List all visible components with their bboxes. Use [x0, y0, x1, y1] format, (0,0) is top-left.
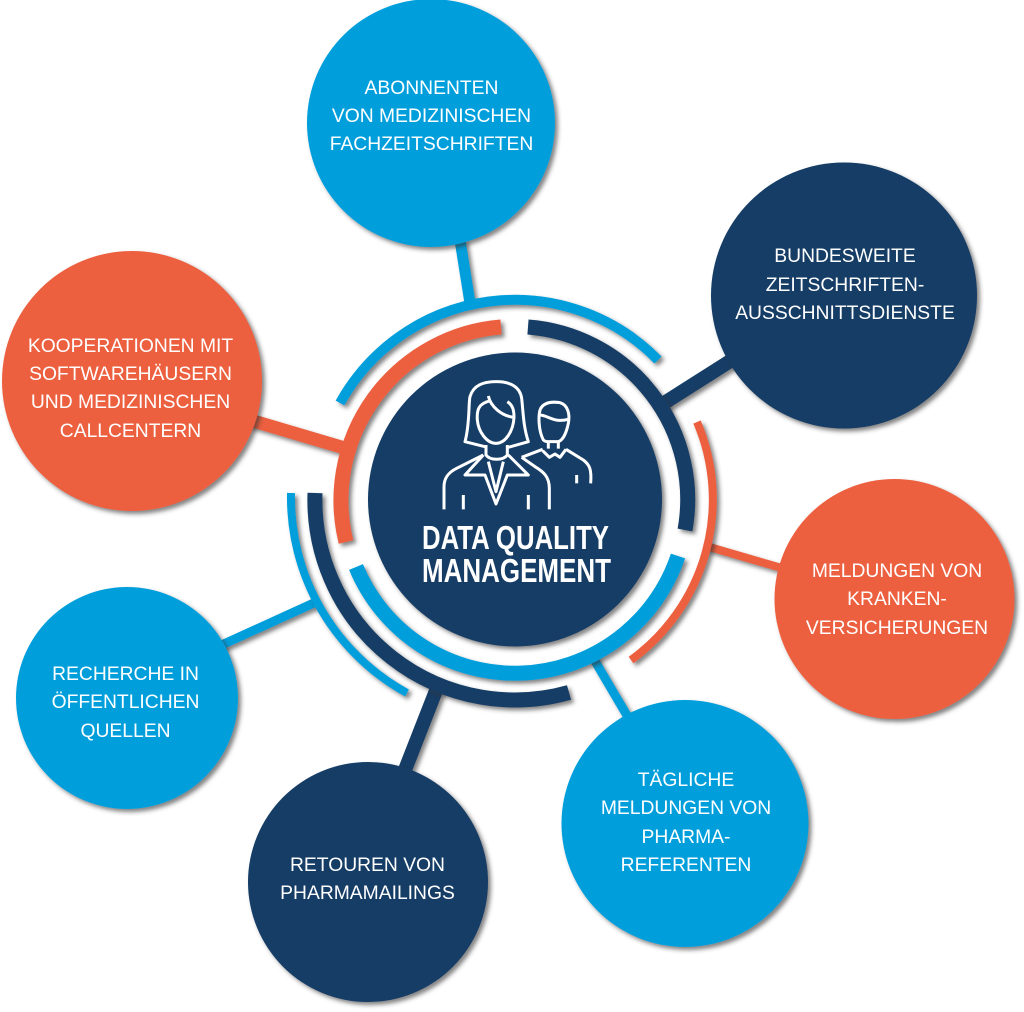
node: daily pharma rep reports: REFERENTEN: [621, 855, 751, 876]
arc: top blue thin: [340, 300, 658, 403]
connector: blue lower right: [592, 656, 632, 724]
connector: blue left: [215, 602, 316, 648]
arc: right navy thick: [528, 327, 688, 530]
node: pharma mailing returns: PHARMAMAILINGS: [280, 883, 455, 904]
node: subscribers of medical journals: FACHZEITSCHRIFTEN: [330, 134, 533, 155]
node: daily pharma rep reports: PHARMA-: [642, 827, 730, 848]
node: health insurer reports: [774, 479, 1014, 719]
node: software house and callcenter cooperations: SOFTWAREHÄUSERN: [29, 363, 232, 385]
node: subscribers of medical journals: VON MEDIZINISCHEN: [332, 106, 531, 127]
node: public source research: QUELLEN: [80, 721, 171, 742]
title: data quality management: [422, 519, 611, 589]
central hub: [368, 352, 662, 646]
node: nationwide clipping services: BUNDESWEITE: [774, 246, 916, 267]
connector: navy upper right: [661, 358, 735, 405]
node: software house and callcenter cooperations: CALLCENTERN: [60, 421, 201, 442]
node: health insurer reports: VERSICHERUNGEN: [806, 618, 988, 639]
node: subscribers of medical journals: [307, 0, 555, 247]
node: nationwide clipping services: AUSSCHNITTSDIENSTE: [735, 303, 955, 324]
node: software house and callcenter cooperations: KOOPERATIONEN MIT: [28, 336, 233, 357]
node: subscribers of medical journals: ABONNENTEN: [365, 78, 498, 99]
node: public source research: RECHERCHE IN: [52, 664, 199, 685]
node: software house and callcenter cooperations: [2, 251, 262, 511]
node: pharma mailing returns: RETOUREN VON: [290, 855, 445, 876]
node: pharma mailing returns: [248, 762, 488, 1002]
node: nationwide clipping services: [711, 162, 977, 428]
node: health insurer reports: MELDUNGEN VON: [812, 561, 982, 582]
node: daily pharma rep reports: MELDUNGEN VON: [601, 798, 771, 819]
node: software house and callcenter cooperations: UND MEDIZINISCHEN: [31, 392, 230, 413]
node: public source research: [16, 587, 238, 809]
arc: bottom blue thick: [356, 556, 678, 673]
node: nationwide clipping services: ZEITSCHRIFTEN-: [766, 275, 924, 296]
icon: two business people: [444, 382, 591, 509]
connector: orange right: [706, 546, 785, 569]
node: daily pharma rep reports: TÄGLICHE: [638, 769, 734, 791]
node: health insurer reports: KRANKEN-: [847, 589, 947, 610]
connector: orange left: [250, 420, 348, 449]
arc: left orange thick: [341, 327, 501, 542]
connector: top blue: [460, 240, 470, 303]
arc: bottom navy thick: [315, 493, 569, 700]
arc: right orange thin: [631, 422, 713, 660]
title: data quality management: DATA QUALITY: [422, 519, 609, 556]
connector: navy bottom: [403, 688, 437, 775]
title: data quality management: MANAGEMENT: [422, 552, 611, 589]
node: daily pharma rep reports: [562, 700, 808, 947]
arc: left blue thin: [291, 493, 407, 693]
node: public source research: ÖFFENTLICHEN: [52, 691, 199, 713]
